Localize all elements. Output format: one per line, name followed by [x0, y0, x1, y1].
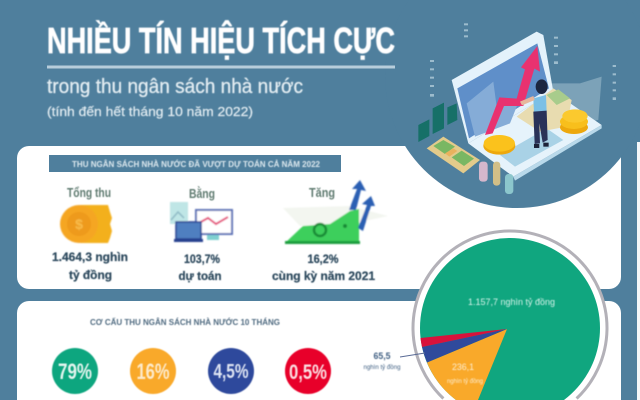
panel: revenue structure: [17, 301, 621, 400]
subtitle: trong thu ngân sách nhà nước: [47, 76, 303, 98]
cash stack left: [427, 137, 480, 173]
panel: budget revenue summary: [17, 146, 621, 289]
badge: 16%: 16%: [136, 359, 170, 384]
callout: blue slice value: nghìn tỷ đồng: [364, 364, 400, 371]
cash stacks on laptop: [517, 88, 572, 132]
icon: dotted lines: [430, 23, 616, 100]
stat: total revenue: 1.464,3 nghìn: [52, 250, 128, 264]
decorative illustration backdrop circle: [385, 0, 640, 208]
pie label: orange slice: 236,1: [452, 362, 474, 373]
icon: green bars: [418, 103, 457, 142]
badge: 4,5%: [208, 348, 254, 394]
banner heading: [49, 155, 341, 172]
badge: 79%: 79%: [58, 359, 92, 384]
callout: blue slice value: 65,5: [374, 351, 391, 362]
faded backdrop chart: [547, 77, 602, 127]
stat: versus estimate: dự toán: [178, 269, 222, 283]
pie label: green slice: 1.157,7 nghìn tỷ đồng: [468, 297, 555, 308]
laptop screen: [452, 32, 553, 143]
person: [520, 79, 549, 148]
pie label: orange slice: nghìn tỷ đồng: [447, 376, 483, 385]
pie chart: [413, 231, 607, 400]
rising pink arrow: [485, 46, 540, 135]
badge: 0,5%: 0,5%: [289, 361, 327, 384]
badge: 4,5%: 4,5%: [214, 361, 249, 383]
stat: total revenue: tỷ đồng: [69, 268, 112, 282]
stat: versus estimate: [170, 186, 232, 283]
date note: (tính đến hết tháng 10 năm 2022): [47, 104, 253, 119]
icon: banknote with arrows: [283, 180, 388, 244]
title: NHIỀU TÍN HIỆU TÍCH CỰC: [47, 19, 395, 61]
stat: year-on-year growth: cùng kỳ năm 2021: [272, 269, 375, 283]
slice: blue: [422, 329, 507, 362]
icon: gold coins: $: [75, 216, 83, 232]
percent badges: [52, 348, 331, 394]
banner heading: THU NGÂN SÁCH NHÀ NƯỚC ĐÃ VƯỢT DỰ TOÁN CẢ NĂM 2022: [72, 158, 320, 169]
badge: 0,5%: [285, 348, 331, 394]
stat: year-on-year growth: 16,2%: [308, 252, 339, 266]
stat: year-on-year growth: Tăng: [309, 185, 335, 200]
slice: green: [420, 238, 600, 400]
stat: total revenue: [52, 185, 128, 282]
slice: red: [420, 329, 507, 347]
illustration: laptop with rising arrow: [418, 23, 616, 194]
pie label: orange slice: [447, 362, 483, 385]
stat: versus estimate: Bằng: [189, 186, 215, 201]
icon: screens with chart: [170, 202, 232, 242]
callout: blue slice value: [364, 351, 425, 371]
structure heading: CƠ CẤU THU NGÂN SÁCH NHÀ NƯỚC 10 THÁNG: [90, 316, 280, 327]
stat: year-on-year growth: [272, 180, 388, 283]
gold coins right: [560, 121, 588, 134]
stat: total revenue: Tổng thu: [67, 185, 111, 200]
badge: 79%: [52, 348, 98, 394]
glowing pillars: [479, 162, 488, 182]
badge: 16%: [130, 348, 176, 394]
slice: orange: [427, 329, 507, 400]
gold coins front: [483, 137, 515, 155]
laptop base: [468, 92, 602, 177]
stat: versus estimate: 103,7%: [184, 252, 220, 266]
